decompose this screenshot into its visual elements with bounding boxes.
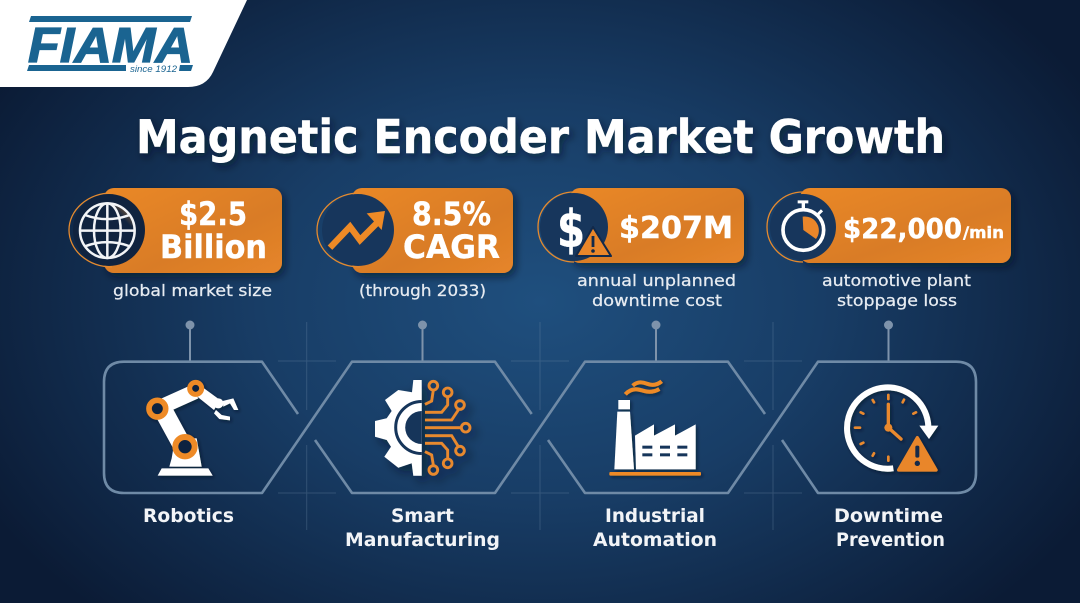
label: [345, 505, 500, 551]
icon: dollar warning: $: [557, 200, 585, 260]
panel: smart manufacturing: [345, 380, 500, 551]
label: Downtime: [834, 505, 943, 527]
caption: automotive plant: [822, 271, 971, 290]
stat card: plant stoppage: [767, 188, 1011, 310]
icon: robot arm: [149, 382, 238, 476]
icon: globe: [69, 193, 145, 267]
value: $2.5: [179, 195, 247, 233]
label: Prevention: [836, 529, 945, 551]
logo: [0, 0, 247, 87]
caption: (through 2033): [359, 281, 486, 300]
stat card: market size: Billion: [160, 228, 267, 266]
caption: stoppage loss: [837, 291, 957, 310]
stat card: CAGR: CAGR: [403, 228, 500, 266]
value: $207M: [619, 211, 733, 246]
title: Magnetic Encoder Market Growth: [136, 110, 945, 164]
orange badge: [104, 188, 282, 273]
stat card: market size: [69, 188, 282, 300]
icon: gear and circuit: [375, 380, 470, 476]
caption: annual unplanned: [577, 271, 736, 290]
orange badge: [570, 188, 744, 263]
value: /min: [963, 223, 1004, 242]
connector pins: [186, 322, 892, 361]
label: [593, 505, 717, 551]
caption: [577, 271, 736, 310]
panel: robotics: [143, 382, 238, 527]
icon: factory: [609, 381, 701, 476]
label: Industrial: [605, 505, 705, 527]
orange badge: [352, 188, 513, 273]
caption: global market size: [113, 281, 272, 300]
icon: growth arrow: [317, 193, 394, 267]
icon: dollar warning: [538, 192, 611, 262]
label: [834, 505, 945, 551]
panel: industrial automation: [593, 381, 717, 551]
caption: downtime cost: [592, 291, 722, 310]
label: Robotics: [143, 505, 234, 527]
caption: [822, 271, 971, 310]
orange badge: [800, 188, 1011, 263]
value: $22,000: [843, 212, 962, 245]
stat card: downtime cost: [538, 188, 744, 310]
icon: clock with warning: [847, 387, 938, 470]
panel: downtime prevention: [834, 387, 945, 551]
hexagon chain frame: [104, 362, 976, 493]
logo: FIAMA: [28, 19, 193, 73]
icon: stopwatch: [767, 192, 836, 262]
label: Manufacturing: [345, 529, 500, 551]
stat card: CAGR: [317, 188, 513, 300]
label: Smart: [391, 505, 454, 527]
logo: since 1912: [130, 64, 178, 75]
label: Automation: [593, 529, 717, 551]
value: 8.5%: [412, 195, 491, 233]
